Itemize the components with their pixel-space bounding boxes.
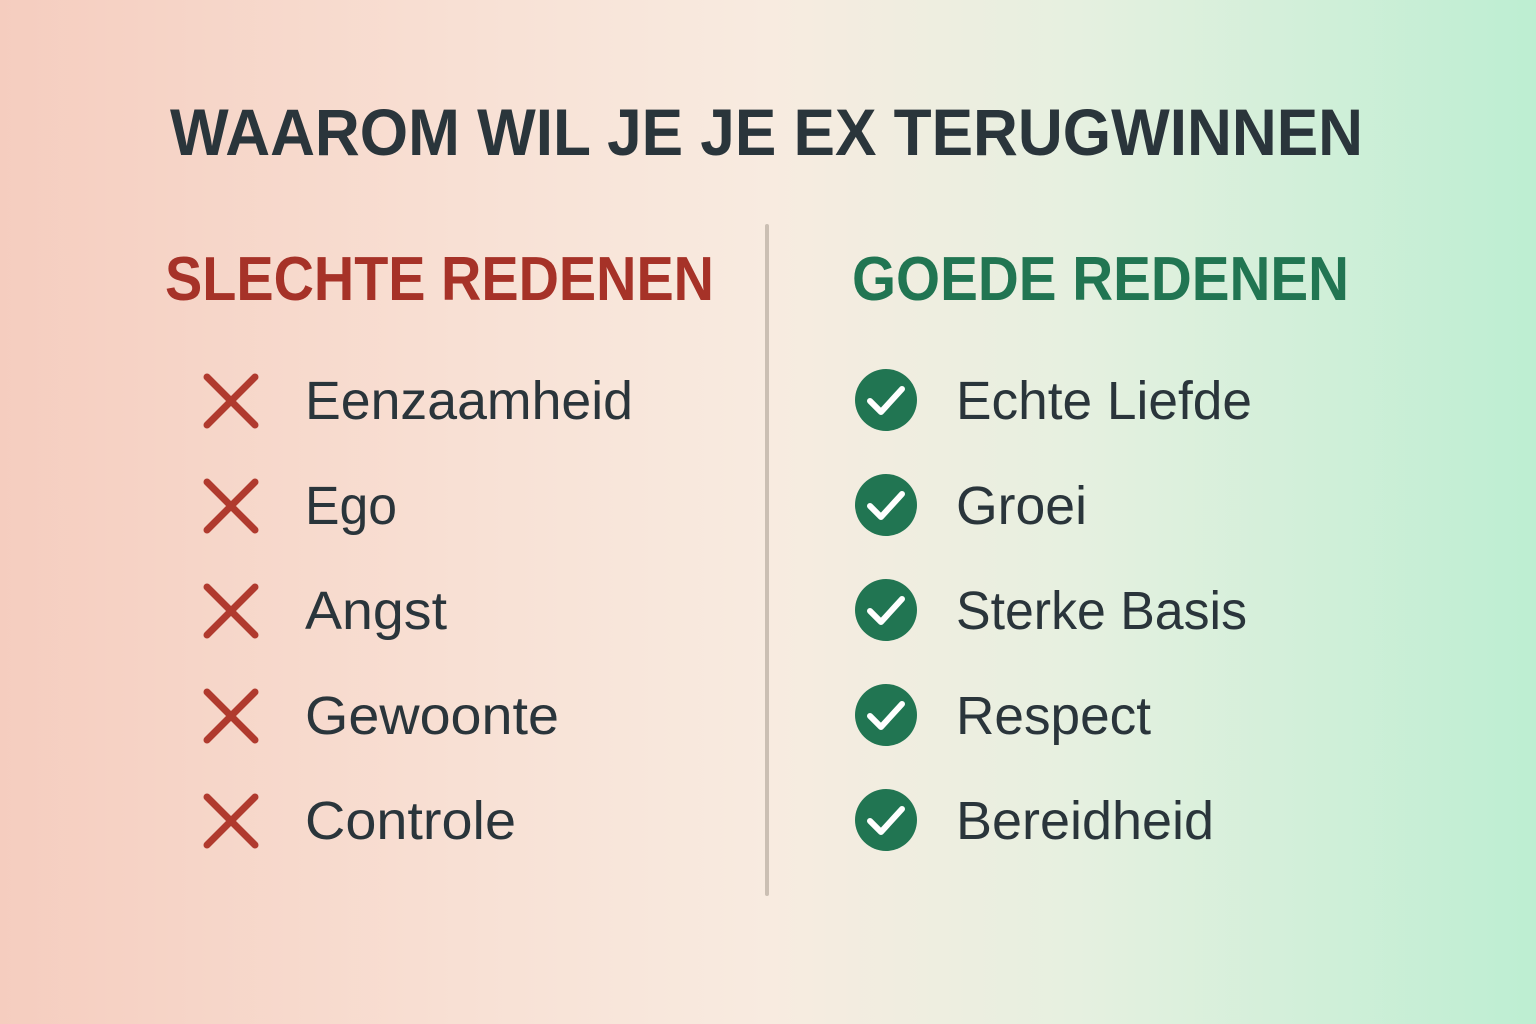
item: Angst: Angst xyxy=(305,581,447,641)
item: Ego xyxy=(207,476,397,536)
item: Groei: Groei xyxy=(956,476,1087,536)
item: Controle: Controle xyxy=(305,791,516,851)
item: Controle xyxy=(207,791,516,851)
item: Groei xyxy=(855,474,1087,536)
item: Sterke Basis: Sterke Basis xyxy=(956,581,1247,641)
item: Gewoonte: Gewoonte xyxy=(305,686,559,746)
item: Respect xyxy=(855,684,1151,746)
item: Angst xyxy=(207,581,447,641)
panel: goede redenen xyxy=(852,245,1349,851)
heading: slechte redenen: SLECHTE REDENEN xyxy=(165,245,714,314)
item: Sterke Basis xyxy=(855,579,1247,641)
list: bad reasons xyxy=(207,371,633,851)
panel: slechte redenen xyxy=(165,245,714,851)
item: Echte Liefde: Echte Liefde xyxy=(956,371,1252,431)
item: Ego: Ego xyxy=(305,476,397,536)
item: Gewoonte xyxy=(207,686,559,746)
list: good reasons xyxy=(855,369,1252,851)
divider xyxy=(765,224,769,896)
item: Respect: Respect xyxy=(956,686,1151,746)
title: WAAROM WIL JE JE EX TERUGWINNEN xyxy=(170,95,1363,169)
item: Eenzaamheid: Eenzaamheid xyxy=(305,371,633,431)
item: Bereidheid: Bereidheid xyxy=(956,791,1214,851)
item: Bereidheid xyxy=(855,789,1214,851)
heading: goede redenen: GOEDE REDENEN xyxy=(852,245,1349,314)
